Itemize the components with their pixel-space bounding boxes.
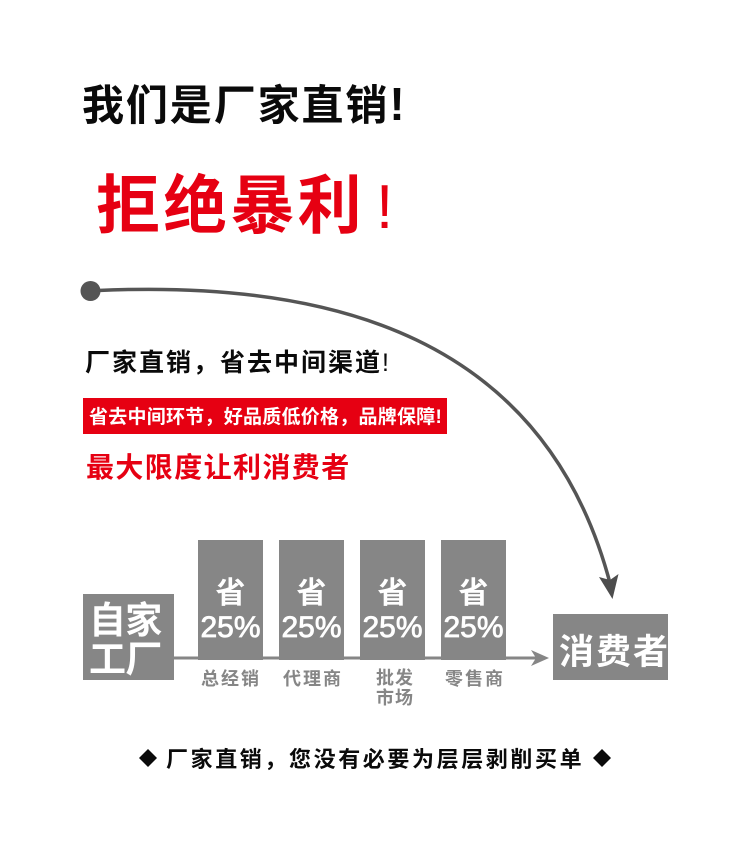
column: distributor saving: [198, 540, 263, 660]
saving label: 省: [378, 568, 408, 612]
text: factory direct, skip channels: 厂家直销，省去中间渠道!: [85, 343, 391, 379]
consumer label: 消费者: [559, 624, 670, 675]
label: retailer: 零售商: [445, 665, 505, 691]
title: factory direct sales: 我们是厂家直销!: [82, 72, 407, 133]
factory label: 工厂: [89, 629, 161, 683]
factory label: 自家: [89, 590, 161, 644]
column: wholesale saving: [360, 540, 425, 660]
label: agent: 代理商: [283, 665, 343, 691]
label: distributor: 总经销: [201, 665, 261, 691]
label: wholesale market: 批发: [376, 664, 414, 690]
saving percent: 25%: [362, 611, 423, 644]
banner text: 省去中间环节，好品质低价格，品牌保障!: [89, 402, 442, 429]
factory label: [89, 590, 162, 683]
label: wholesale market: 市场: [376, 684, 414, 710]
heading: refuse excess profit: 拒绝暴利: [96, 155, 365, 247]
saving label: 省: [216, 568, 246, 612]
label: wholesale market: [376, 664, 414, 710]
saving label: 省: [458, 568, 488, 612]
box: consumer: [553, 614, 668, 680]
saving percent: 25%: [200, 611, 261, 644]
column: agent saving: [279, 540, 344, 660]
saving percent: 25%: [443, 611, 504, 644]
diamond right: [593, 749, 611, 767]
red banner: [83, 398, 447, 434]
text: maximum benefit to consumers: 最大限度让利消费者: [86, 446, 351, 486]
box: own factory: [83, 594, 174, 680]
heading exclamation mark: !: [376, 173, 393, 242]
saving label: 省: [296, 568, 326, 612]
saving percent: 25%: [281, 611, 342, 644]
diamond left: [139, 749, 157, 767]
footer slogan: 厂家直销，您没有必要为层层剥削买单: [166, 742, 584, 774]
column: retailer saving: [441, 540, 506, 660]
